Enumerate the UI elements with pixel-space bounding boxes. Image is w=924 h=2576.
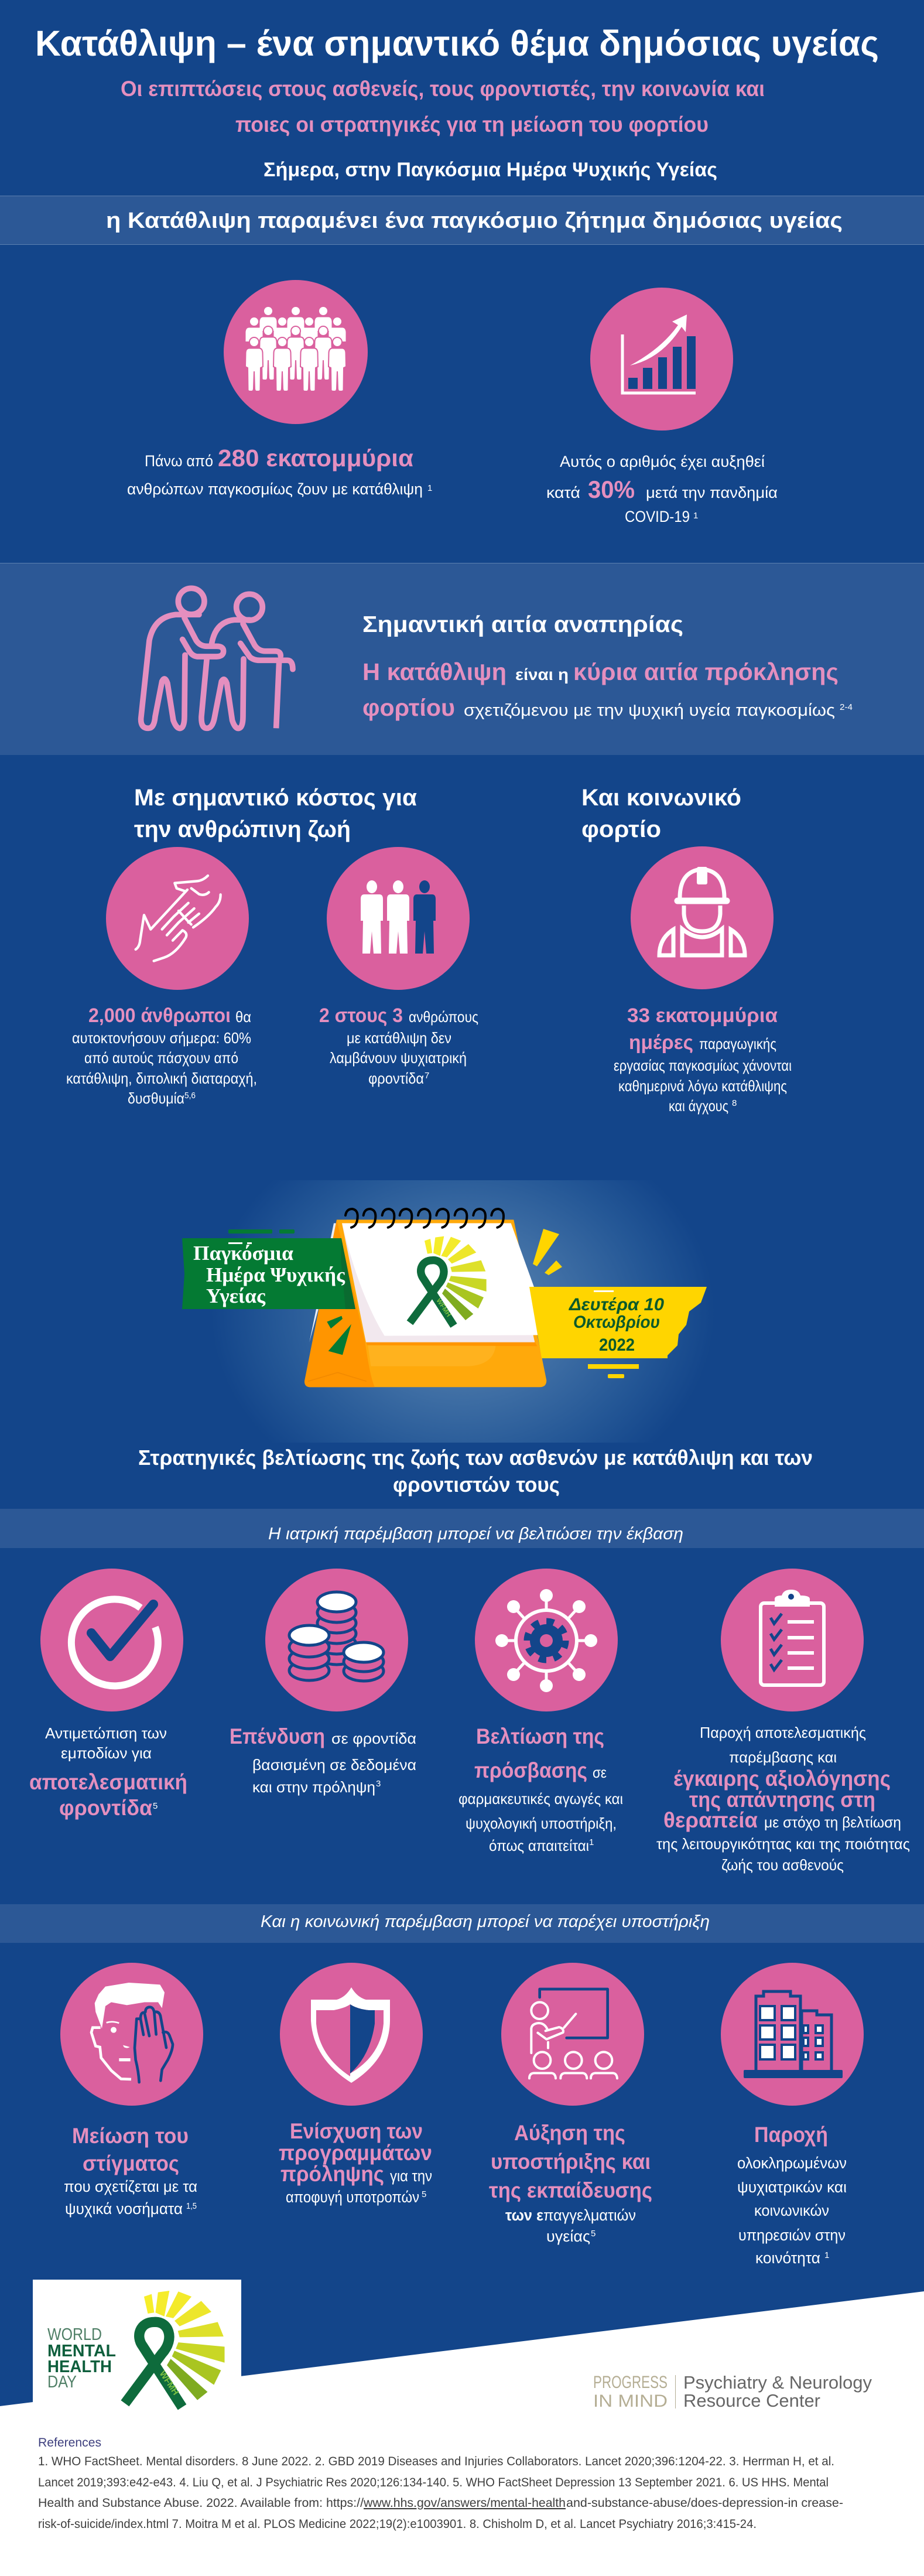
text: 33 million days: εργασίας παγκοσμίως χάνονται [614, 1057, 792, 1074]
text: integrated services: κοινωνικών [754, 2202, 829, 2219]
icon: shield [280, 1963, 423, 2106]
text: 2,000 people: από αυτούς πάσχουν από [84, 1049, 238, 1067]
icon: elderly couple [141, 588, 293, 728]
icon: calendar: WFMH [434, 1297, 452, 1318]
text: support and training: 5 [591, 2229, 596, 2239]
text: integrated services: 1 [824, 2250, 829, 2260]
text: reducing stigma: που σχετίζεται με τα [64, 2178, 197, 2195]
text: removing barriers: φροντίδα [59, 1796, 152, 1820]
references: Lancet 2019;393:e42-e43. 4. Liu Q, et al. J Psychiatric Res 2020;126:134-140. 5. WHO FactSheet Depression 13 September 2021. 6. US HHS. Mental [38, 2476, 829, 2489]
references: www.hhs.gov/answers/mental-health [363, 2496, 566, 2510]
text: 2,000 people: κατάθλιψη, διπολική διαταραχή, [66, 1070, 257, 1087]
text: prevention programmes: Ενίσχυση των [290, 2119, 423, 2143]
text: timely assessment: ζωής του ασθενούς [721, 1856, 844, 1874]
text: integrated services: ολοκληρωμένων [737, 2154, 847, 2172]
heading: human cost [134, 785, 417, 842]
band: social intervention [0, 1904, 924, 1943]
text: removing barriers: Αντιμετώπιση των [45, 1724, 167, 1742]
text: 2,000 people: 2,000 άνθρωποι [88, 1005, 231, 1027]
band: global issue heading: η Κατάθλιψη παραμένει ένα παγκόσμιο ζήτημα δημόσιας υγείας [106, 209, 843, 233]
icon: construction worker [631, 846, 774, 989]
stat: 280 million: Πάνω από [145, 452, 213, 470]
banner: green, event name [182, 1229, 355, 1309]
text: 2 in 3 people: φροντίδα [368, 1070, 424, 1087]
text: improving access: πρόσβασης [474, 1758, 587, 1782]
text: 2,000 people [66, 1005, 257, 1107]
text: investment: Επένδυση [230, 1724, 325, 1748]
stat: 280 million: ανθρώπων παγκοσμίως ζουν με κατάθλιψη [127, 480, 423, 498]
heading: strategies [138, 1446, 813, 1497]
text: prevention programmes: για την [390, 2167, 432, 2185]
logo: Progress in Mind: IN MIND [593, 2391, 668, 2411]
text: integrated services: ψυχιατρικών και [737, 2178, 847, 2196]
subtitle: ποιες οι στρατηγικές για τη μείωση του φορτίου [235, 112, 709, 136]
text: timely assessment: της λειτουργικότητας και της ποιότητας [656, 1835, 910, 1853]
stat: 30 percent: μετά την πανδημία [646, 484, 778, 501]
text: improving access: 1 [589, 1837, 594, 1847]
logo: World Mental Health Day: DAY [47, 2373, 77, 2391]
stat: 280 million: 1 [427, 483, 432, 493]
text: 33 million days: και άγχους [669, 1097, 728, 1115]
stat: 30 percent: 30% [588, 476, 635, 503]
text: 2 in 3 people: με κατάθλιψη δεν [347, 1029, 451, 1047]
text: leading cause: Η κατάθλιψη [362, 658, 507, 685]
text: 33 million days: καθημερινά λόγω κατάθλιψης [618, 1077, 787, 1095]
band: medical intervention: Η ιατρική παρέμβαση μπορεί να βελτιώσει την έκβαση [268, 1525, 683, 1543]
text: reducing stigma: Μείωση του [72, 2124, 189, 2148]
text: timely assessment: έγκαιρης αξιολόγησης [673, 1767, 891, 1791]
text: 2,000 people: θα [235, 1008, 251, 1026]
logo: World Mental Health Day: MENTAL [47, 2342, 116, 2360]
logo: Progress in Mind: PROGRESS [593, 2373, 668, 2392]
text: improving access: φαρμακευτικές αγωγές και [458, 1790, 623, 1808]
text: investment [230, 1724, 416, 1796]
text: support and training: υγείας [546, 2227, 590, 2245]
text: 33 million days: 8 [732, 1098, 737, 1108]
references: and-substance-abuse/does-depression-in crease- [566, 2496, 843, 2510]
stat: 30 percent: Αυτός ο αριθμός έχει αυξηθεί [560, 453, 765, 470]
logo: World Mental Health Day: WORLD [47, 2325, 102, 2344]
text: leading cause: φορτίου [362, 694, 455, 721]
text: 2 in 3 people: 2 στους 3 [319, 1005, 403, 1027]
banner: yellow, event date [529, 1287, 707, 1378]
band: social intervention: Και η κοινωνική παρέμβαση μπορεί να παρέχει υποστήριξη [261, 1912, 710, 1931]
text: 2,000 people: δυσθυμία [128, 1089, 184, 1107]
text: integrated services: Παροχή [754, 2123, 828, 2147]
text: reducing stigma: ψυχικά νοσήματα [65, 2200, 183, 2218]
text: prevention programmes: προγραμμάτων [279, 2141, 432, 2165]
text: improving access: όπως απαιτείται [489, 1837, 589, 1854]
icon: yellow sparks [533, 1229, 562, 1275]
text: improving access: σε [593, 1764, 607, 1781]
date line: Σήμερα, στην Παγκόσμια Ημέρα Ψυχικής Υγείας [263, 159, 717, 181]
text: prevention programmes: αποφυγή υποτροπών [286, 2188, 419, 2206]
stat: 30 percent: COVID-19 [625, 508, 690, 525]
text: 2,000 people: 5,6 [184, 1091, 196, 1101]
heading: human cost: την ανθρώπινη ζωή [134, 816, 351, 842]
title: Κατάθλιψη – ένα σημαντικό θέμα δημόσιας υγείας [35, 23, 879, 63]
text: reducing stigma [64, 2124, 197, 2218]
icon: community buildings [721, 1963, 864, 2106]
heading: cause of disability: Σημαντική αιτία αναπηρίας [362, 612, 683, 637]
text: 2 in 3 people: ανθρώπους [409, 1008, 478, 1026]
references: risk-of-suicide/index.html 7. Moitra M et al. PLOS Medicine 2022;19(2):e1003901. 8. Chisholm D, et al. Lancet Psychiatry 2016;3:415-24. [38, 2517, 757, 2531]
icon: face covered by hand [60, 1963, 203, 2106]
heading: social burden [581, 785, 741, 842]
text: prevention programmes: 5 [422, 2189, 426, 2199]
references: References [38, 2436, 101, 2449]
banner: yellow, event date: Δευτέρα 10 [569, 1295, 664, 1314]
text: support and training: Αύξηση της [514, 2121, 625, 2145]
banner: green, event name: Υγείας [206, 1284, 266, 1307]
text: improving access: Βελτίωση της [476, 1724, 604, 1748]
text: timely assessment: της απάντησης στη [689, 1788, 875, 1812]
text: removing barriers: αποτελεσματική [29, 1770, 187, 1794]
text: 2 in 3 people [319, 1005, 478, 1087]
stat: 280 million: 280 εκατομμύρια [218, 445, 413, 472]
heading: human cost: Με σημαντικό κόστος για [134, 785, 417, 811]
references: Health and Substance Abuse. 2022. Available from: https:// [38, 2496, 364, 2510]
text: leading cause: κύρια αιτία πρόκλησης [573, 658, 839, 685]
band: global issue heading [0, 196, 924, 245]
text: timely assessment [656, 1724, 910, 1874]
text: support and training: υποστήριξης και [491, 2150, 651, 2174]
logo: World Mental Health Day: HEALTH [47, 2358, 112, 2376]
logo: Progress in Mind: Psychiatry & Neurology [683, 2372, 872, 2393]
text: 33 million days: 33 εκατομμύρια [627, 1005, 778, 1027]
panel: World Mental Health Day calendar [182, 1180, 714, 1443]
text: removing barriers: 5 [153, 1801, 158, 1811]
text: timely assessment: με στόχο τη βελτίωση [764, 1813, 901, 1831]
logo: Progress in Mind: Resource Center [683, 2390, 820, 2411]
text: integrated services: κοινότητα [755, 2249, 820, 2267]
text: 33 million days: παραγωγικής [699, 1035, 776, 1053]
logo: World Mental Health Day [33, 2280, 241, 2420]
icon: crowd of people [224, 280, 368, 424]
icon: teacher with audience [501, 1963, 644, 2106]
text: investment: και στην πρόληψη [252, 1778, 375, 1796]
heading: strategies: Στρατηγικές βελτίωσης της ζωής των ασθενών με κατάθλιψη και των [138, 1446, 813, 1470]
text: 2 in 3 people: λαμβάνουν ψυχιατρική [330, 1049, 467, 1067]
text: support and training: των επαγγελματιών [505, 2206, 636, 2224]
heading: social burden: φορτίο [581, 816, 661, 842]
logo: Progress in Mind [593, 2372, 872, 2411]
banner: yellow, event date: 2022 [599, 1335, 635, 1355]
text: leading cause: είναι η [515, 665, 569, 684]
text: prevention programmes [279, 2119, 432, 2206]
stat: 30 percent: 1 [693, 511, 698, 521]
text: support and training: της εκπαίδευσης [489, 2178, 652, 2202]
band: medical intervention [0, 1509, 924, 1548]
icon: calendar [304, 1209, 552, 1387]
subtitle [121, 77, 765, 136]
text: leading cause: 2-4 [840, 702, 853, 712]
text: removing barriers [29, 1724, 187, 1820]
text: timely assessment: θεραπεία [663, 1808, 758, 1832]
icon: rising bar chart [590, 288, 733, 431]
references: 1. WHO FactSheet. Mental disorders. 8 June 2022. 2. GBD 2019 Diseases and Injuries Collaborators. Lancet 2020;396:1204-22. 3. Herrman H, et al. [38, 2455, 834, 2468]
banner: green, event name: Παγκόσμια [193, 1242, 293, 1265]
text: investment: σε φροντίδα [331, 1730, 416, 1747]
text: integrated services [737, 2123, 847, 2267]
panel: disability [0, 563, 924, 755]
text: improving access: ψυχολογική υποστήριξη, [466, 1815, 617, 1832]
text: reducing stigma: στίγματος [83, 2151, 179, 2175]
icon: three people, one highlighted [327, 847, 470, 990]
text: improving access [458, 1724, 623, 1854]
text: 2 in 3 people: 7 [425, 1071, 429, 1081]
heading: strategies: φροντιστών τους [393, 1473, 560, 1497]
text: 33 million days [614, 1005, 792, 1115]
text: 2,000 people: αυτοκτονήσουν σήμερα: 60% [72, 1029, 251, 1047]
text: integrated services: υπηρεσιών στην [738, 2226, 846, 2244]
banner: yellow, event date: Οκτωβρίου [573, 1313, 660, 1332]
heading: social burden: Και κοινωνικό [581, 785, 741, 811]
stat: 280 million [127, 445, 432, 498]
icon: gear network [475, 1569, 618, 1711]
icon: coin stacks [265, 1569, 408, 1711]
references [38, 2436, 843, 2531]
text: timely assessment: παρέμβασης και [729, 1748, 837, 1766]
text: leading cause: σχετιζόμενου με την ψυχική υγεία παγκοσμίως [464, 701, 835, 720]
icon: clipboard [721, 1569, 864, 1711]
stat: 30 percent [546, 453, 778, 525]
subtitle: Οι επιπτώσεις στους ασθενείς, τους φροντιστές, την κοινωνία και [121, 77, 765, 101]
logo: World Mental Health Day: WFMH [158, 2369, 181, 2397]
stat: 30 percent: κατά [546, 484, 580, 501]
banner: green, event name: Ημέρα Ψυχικής [206, 1263, 345, 1286]
text: investment: βασισμένη σε δεδομένα [252, 1756, 416, 1774]
text: support and training [489, 2121, 652, 2245]
text: removing barriers: εμποδίων για [61, 1744, 152, 1762]
icon: checkmark [40, 1569, 183, 1711]
text: investment: 3 [376, 1779, 381, 1789]
text: reducing stigma: 1,5 [186, 2201, 197, 2211]
text: timely assessment: Παροχή αποτελεσματικής [700, 1724, 866, 1741]
text: prevention programmes: πρόληψης [280, 2162, 384, 2186]
icon: reaching hands [106, 847, 249, 990]
text: leading cause [362, 658, 853, 721]
text: 33 million days: ημέρες [629, 1031, 693, 1054]
